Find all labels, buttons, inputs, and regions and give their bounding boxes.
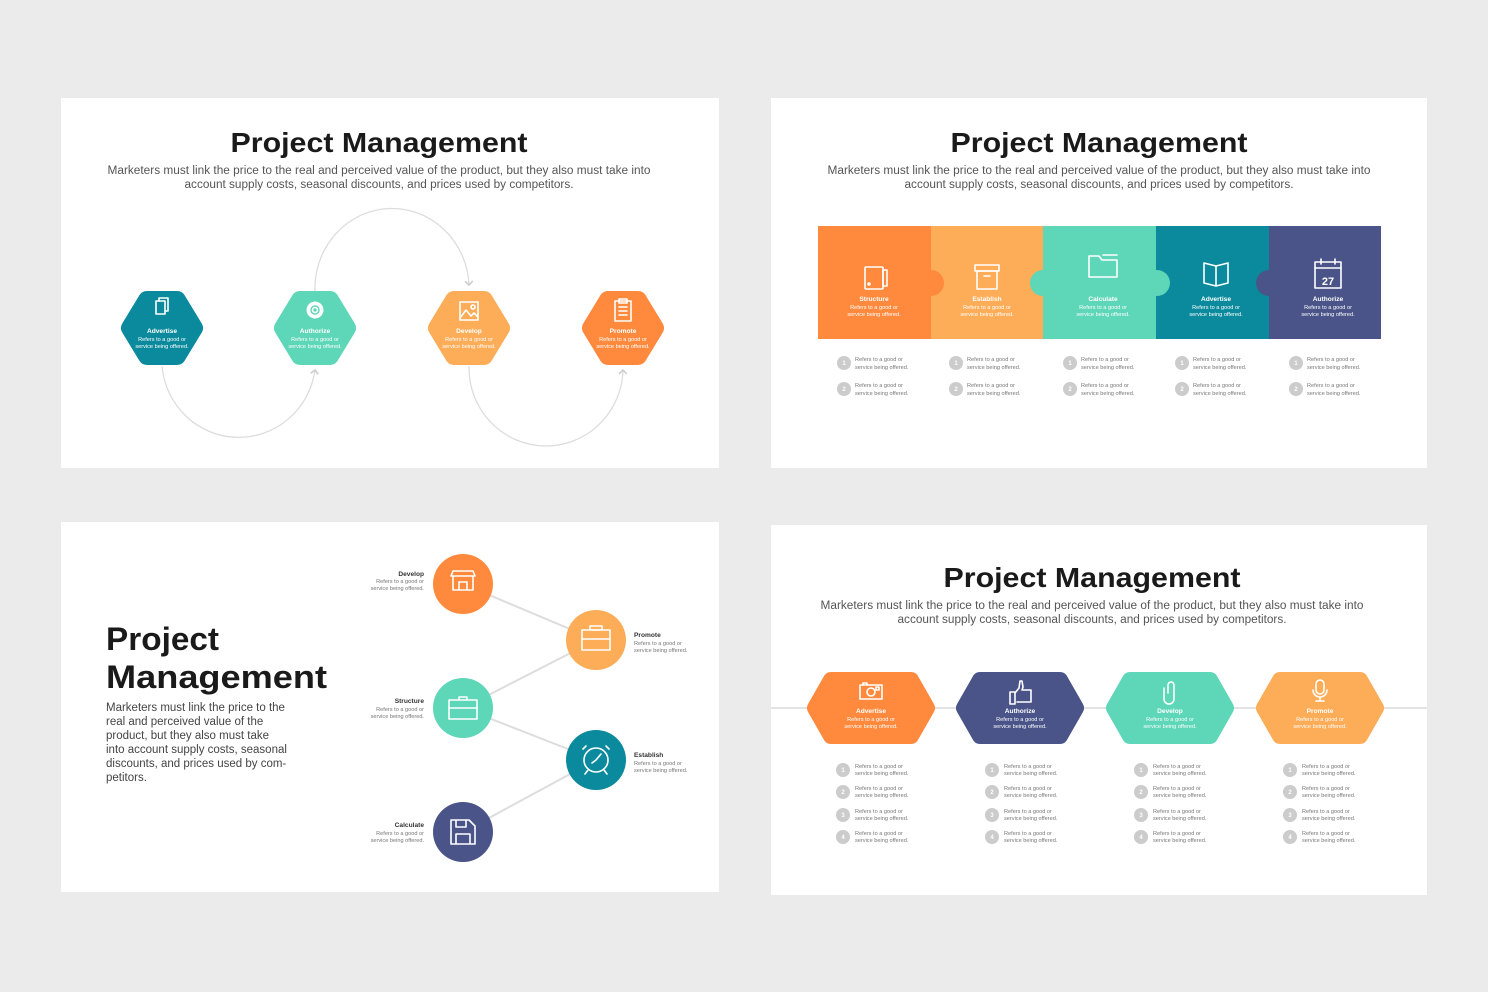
block: Structure: service being offered. <box>847 312 901 318</box>
numbered lists: service being offered. <box>1004 771 1058 777</box>
numbered lists: Refers to a good or <box>1004 809 1052 815</box>
numbered lists: 3 <box>1139 813 1143 819</box>
hexagon: Authorize: Refers to a good or <box>291 337 339 343</box>
numbered lists: Refers to a good or <box>855 786 903 792</box>
title: Management <box>106 659 327 695</box>
hexagon: Develop: service being offered. <box>442 344 496 350</box>
node: Develop: service being offered. <box>371 586 424 592</box>
lists under blocks: Refers to a good or <box>967 357 1015 363</box>
hexagon: Promote: Refers to a good or <box>1296 717 1344 723</box>
numbered lists: 1 <box>990 768 994 774</box>
numbered lists: Refers to a good or <box>1302 809 1350 815</box>
node: Calculate: Refers to a good or <box>376 831 424 837</box>
lists under blocks: Refers to a good or <box>1081 357 1129 363</box>
hexagon: Develop: Develop <box>456 328 482 335</box>
lists under blocks: Refers to a good or <box>967 383 1015 389</box>
hexagon: Promote: Promote <box>1307 708 1334 715</box>
node: Promote: Refers to a good or <box>634 641 682 647</box>
hexagon: Develop: service being offered. <box>1143 724 1197 730</box>
block: Establish: Refers to a good or <box>963 305 1011 311</box>
numbered lists: 4 <box>1139 835 1143 841</box>
horizontal line <box>771 707 1427 709</box>
node: Promote <box>566 610 688 670</box>
arrows: arcs <box>162 208 623 446</box>
lists under blocks: service being offered. <box>1081 391 1135 397</box>
numbered lists: service being offered. <box>855 816 909 822</box>
hexagon: Advertise <box>130 298 194 356</box>
numbered lists: service being offered. <box>1153 838 1207 844</box>
block: Calculate: Calculate <box>1088 296 1118 303</box>
body text: Marketers must link the price to the <box>106 702 285 714</box>
numbered lists <box>836 763 1356 844</box>
block: Authorize: Refers to a good or <box>1304 305 1352 311</box>
lists under blocks: service being offered. <box>1307 365 1361 371</box>
node: Promote: service being offered. <box>634 648 688 654</box>
block: Advertise: service being offered. <box>1189 312 1243 318</box>
numbered lists: service being offered. <box>1153 816 1207 822</box>
lists under blocks: service being offered. <box>1081 365 1135 371</box>
lists under blocks: 2 <box>1294 387 1298 393</box>
hexagon: Promote: service being offered. <box>596 344 650 350</box>
numbered lists: service being offered. <box>855 793 909 799</box>
numbered lists: service being offered. <box>1302 816 1356 822</box>
numbered lists: Refers to a good or <box>1302 786 1350 792</box>
hexagon: Authorize: Refers to a good or <box>996 717 1044 723</box>
lists under blocks: 2 <box>1068 387 1072 393</box>
lists under blocks: service being offered. <box>1193 365 1247 371</box>
block: Authorize: service being offered. <box>1301 312 1355 318</box>
lists under blocks: Refers to a good or <box>855 383 903 389</box>
node: Promote: Promote <box>634 632 661 639</box>
numbered lists: service being offered. <box>855 771 909 777</box>
connector lines <box>463 584 596 832</box>
numbered lists: Refers to a good or <box>1153 831 1201 837</box>
lists under blocks: 2 <box>842 387 846 393</box>
numbered lists: Refers to a good or <box>1302 831 1350 837</box>
hexagon: Advertise: Refers to a good or <box>847 717 895 723</box>
hexagon: Promote: Promote <box>610 328 637 335</box>
numbered lists: service being offered. <box>1302 793 1356 799</box>
hexagon: Advertise: service being offered. <box>844 724 898 730</box>
body text: into account supply costs, seasonal <box>106 744 287 756</box>
hexagon: Authorize <box>283 300 347 356</box>
block: Advertise <box>1189 263 1243 318</box>
lists under blocks: 2 <box>1180 387 1184 393</box>
hexagon: Promote <box>1264 680 1376 736</box>
hexagon: Advertise: Refers to a good or <box>138 337 186 343</box>
hexagon: Promote <box>591 299 655 356</box>
lists under blocks: 1 <box>1180 361 1184 367</box>
title: Project Management <box>944 562 1240 593</box>
body text <box>106 702 287 784</box>
node: Calculate: Calculate <box>395 822 424 829</box>
node: Structure <box>371 678 493 738</box>
numbered lists: 3 <box>841 813 845 819</box>
block: Establish: Establish <box>972 296 1002 303</box>
node: Establish: Refers to a good or <box>634 761 682 767</box>
panel: zigzag circles <box>61 522 719 892</box>
block: Establish: service being offered. <box>960 312 1014 318</box>
numbered lists: 2 <box>1288 790 1292 796</box>
numbered lists: Refers to a good or <box>1153 764 1201 770</box>
hexagon: Develop <box>437 300 501 356</box>
title: Project Management <box>230 127 528 158</box>
lists under blocks <box>837 356 1361 397</box>
numbered lists: 2 <box>990 790 994 796</box>
numbered lists: Refers to a good or <box>855 764 903 770</box>
numbered lists: Refers to a good or <box>855 831 903 837</box>
hexagon: Authorize: Authorize <box>300 328 331 335</box>
title <box>106 621 327 695</box>
subtitle <box>828 165 1370 191</box>
hexagon: Develop: Refers to a good or <box>445 337 493 343</box>
numbered lists: 4 <box>990 835 994 841</box>
numbered lists: service being offered. <box>1004 838 1058 844</box>
numbered lists: service being offered. <box>1153 793 1207 799</box>
subtitle: Marketers must link the price to the real and perceived value of the product, but they also must take into <box>828 165 1370 177</box>
lists under blocks: Refers to a good or <box>1193 383 1241 389</box>
node: Develop: Refers to a good or <box>376 579 424 585</box>
node: Calculate <box>371 802 493 862</box>
lists under blocks: Refers to a good or <box>1193 357 1241 363</box>
numbered lists: service being offered. <box>1302 771 1356 777</box>
lists under blocks: 1 <box>954 361 958 367</box>
numbered lists: Refers to a good or <box>1153 809 1201 815</box>
numbered lists: service being offered. <box>1153 771 1207 777</box>
node: Structure: service being offered. <box>371 714 424 720</box>
hexagon: Advertise: Advertise <box>147 328 177 335</box>
lists under blocks: service being offered. <box>1307 391 1361 397</box>
numbered lists: 1 <box>841 768 845 774</box>
body text: petitors. <box>106 772 147 784</box>
lists under blocks: service being offered. <box>1193 391 1247 397</box>
hexagon: Develop: Refers to a good or <box>1146 717 1194 723</box>
panel: hexagon row <box>771 525 1427 895</box>
subtitle: Marketers must link the price to the real and perceived value of the product, but they also must take into <box>108 165 650 177</box>
body text: real and perceived value of the <box>106 716 263 728</box>
block: Calculate <box>1076 255 1130 318</box>
hexagon: Promote: Refers to a good or <box>599 337 647 343</box>
numbered lists: Refers to a good or <box>1004 786 1052 792</box>
hexagon: Authorize: Authorize <box>1005 708 1036 715</box>
numbered lists: service being offered. <box>1004 793 1058 799</box>
numbered lists: 2 <box>1139 790 1143 796</box>
lists under blocks: Refers to a good or <box>1307 383 1355 389</box>
hexagon: Authorize: service being offered. <box>993 724 1047 730</box>
node: Establish: service being offered. <box>634 768 688 774</box>
numbered lists: 4 <box>841 835 845 841</box>
subtitle: account supply costs, seasonal discounts, and prices used by competitors. <box>184 179 574 191</box>
hexagon: Promote: service being offered. <box>1293 724 1347 730</box>
subtitle: account supply costs, seasonal discounts, and prices used by competitors. <box>904 179 1294 191</box>
numbered lists: Refers to a good or <box>1153 786 1201 792</box>
lists under blocks: 1 <box>1068 361 1072 367</box>
lists under blocks: 1 <box>842 361 846 367</box>
numbered lists: Refers to a good or <box>1004 764 1052 770</box>
block: Calculate: Refers to a good or <box>1079 305 1127 311</box>
numbered lists: 3 <box>990 813 994 819</box>
node: Establish <box>566 730 688 790</box>
block: Authorize <box>1301 259 1355 318</box>
numbered lists: 1 <box>1288 768 1292 774</box>
numbered lists: 4 <box>1288 835 1292 841</box>
block: Authorize: 27 <box>1322 276 1334 288</box>
hexagon: Authorize: service being offered. <box>288 344 342 350</box>
hexagon: Develop <box>1114 680 1226 736</box>
subtitle <box>108 165 650 191</box>
node: Structure: Refers to a good or <box>376 707 424 713</box>
title: Project <box>106 621 219 657</box>
node: Develop <box>371 554 493 614</box>
block: Authorize: Authorize <box>1313 296 1344 303</box>
body text: product, but they also must take <box>106 730 269 742</box>
hexagon: Advertise: service being offered. <box>135 344 189 350</box>
numbered lists: service being offered. <box>1004 816 1058 822</box>
numbered lists: Refers to a good or <box>1302 764 1350 770</box>
numbered lists: Refers to a good or <box>855 809 903 815</box>
body text: discounts, and prices used by com- <box>106 758 286 770</box>
node: Develop: Develop <box>398 571 424 578</box>
hexagon: Advertise <box>815 680 927 736</box>
node: Establish: Establish <box>634 752 663 759</box>
lists under blocks: service being offered. <box>855 365 909 371</box>
hexagon: Authorize <box>964 680 1076 736</box>
lists under blocks: service being offered. <box>967 391 1021 397</box>
numbered lists: service being offered. <box>855 838 909 844</box>
node: Structure: Structure <box>395 698 424 705</box>
numbered lists: 3 <box>1288 813 1292 819</box>
lists under blocks: Refers to a good or <box>1307 357 1355 363</box>
lists under blocks: 1 <box>1294 361 1298 367</box>
title: Project Management <box>950 127 1248 158</box>
lists under blocks: service being offered. <box>855 391 909 397</box>
numbered lists: service being offered. <box>1302 838 1356 844</box>
lists under blocks: Refers to a good or <box>1081 383 1129 389</box>
hexagon: Develop: Develop <box>1157 708 1183 715</box>
numbered lists: 2 <box>841 790 845 796</box>
block: Structure: Structure <box>859 296 889 303</box>
block: Establish <box>960 265 1014 318</box>
block: Advertise: Advertise <box>1201 296 1231 303</box>
panel: puzzle blocks <box>771 98 1427 468</box>
panel: hexagon cycle <box>61 98 719 468</box>
subtitle <box>820 600 1364 626</box>
lists under blocks: service being offered. <box>967 365 1021 371</box>
numbered lists: Refers to a good or <box>1004 831 1052 837</box>
block: Calculate: service being offered. <box>1076 312 1130 318</box>
hexagon: Advertise: Advertise <box>856 708 886 715</box>
block: Advertise: Refers to a good or <box>1192 305 1240 311</box>
puzzle strip <box>818 226 1381 339</box>
subtitle: Marketers must link the price to the real and perceived value of the product, but they also must take into <box>820 600 1364 612</box>
block: Structure: Refers to a good or <box>850 305 898 311</box>
lists under blocks: Refers to a good or <box>855 357 903 363</box>
block: Structure <box>847 267 901 318</box>
subtitle: account supply costs, seasonal discounts, and prices used by competitors. <box>898 614 1286 626</box>
node: Calculate: service being offered. <box>371 838 424 844</box>
numbered lists: 1 <box>1139 768 1143 774</box>
lists under blocks: 2 <box>954 387 958 393</box>
